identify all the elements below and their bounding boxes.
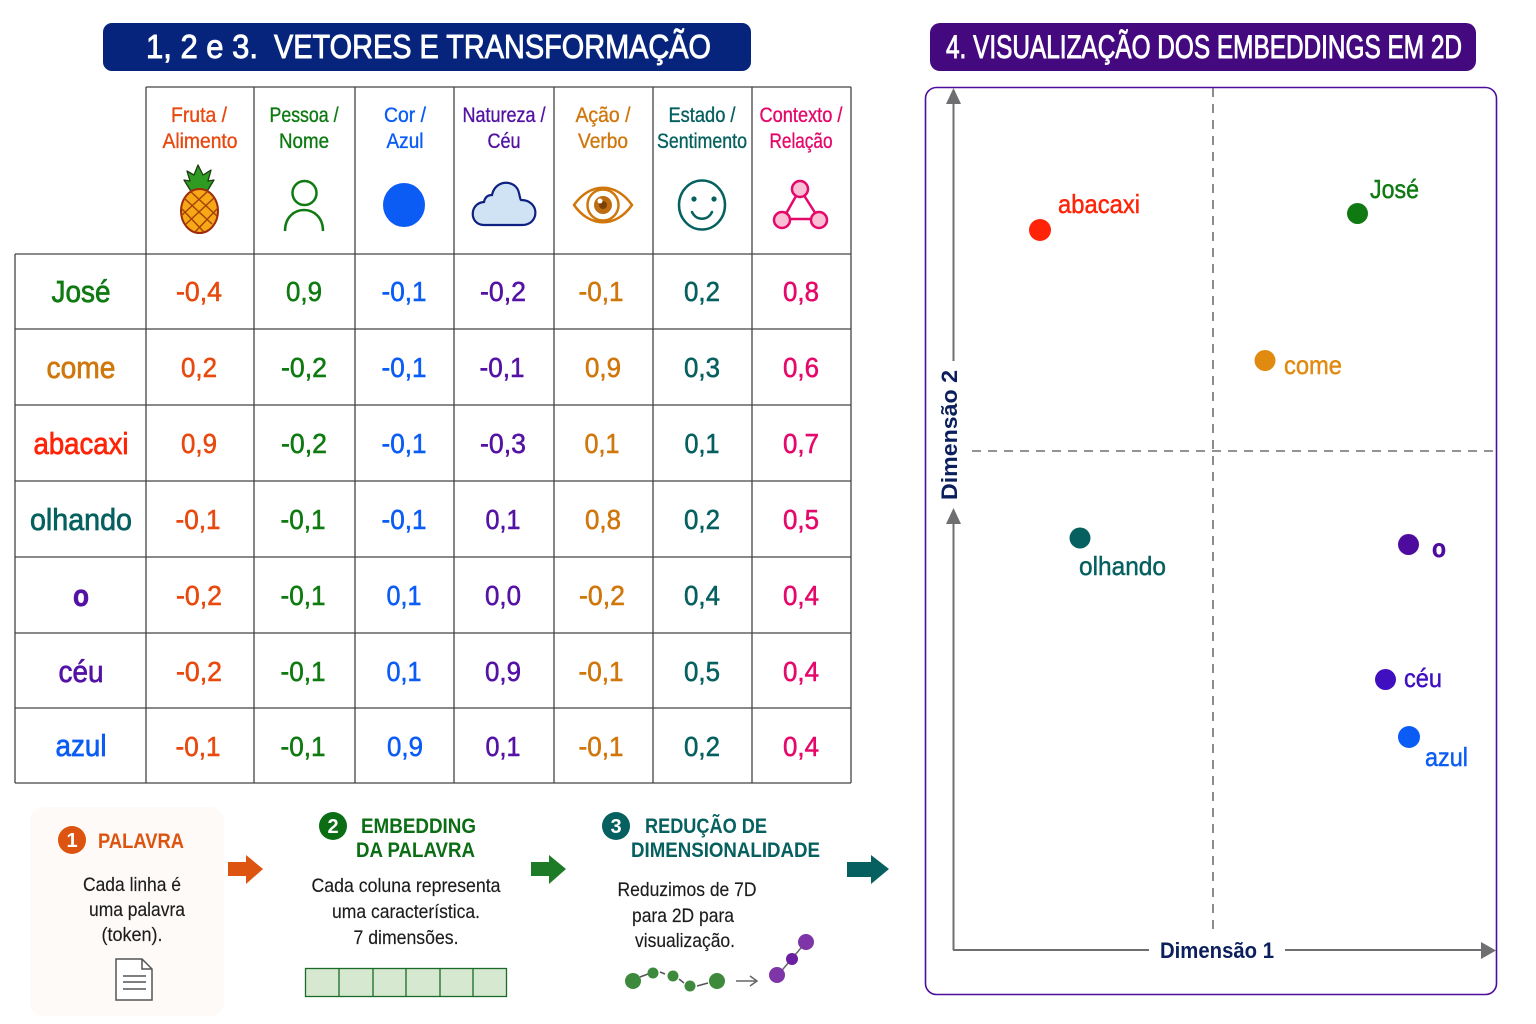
column values: natureza: 0,0 (485, 580, 521, 611)
column headers: Nome (279, 130, 329, 153)
heading redução (631, 815, 820, 862)
step 1 text (83, 874, 185, 946)
step 3 text (618, 879, 756, 952)
column values: contexto: 0,8 (783, 276, 819, 307)
column headers: Relação (770, 130, 832, 153)
badge 2: 2 (327, 816, 339, 838)
icon: pineapple (181, 165, 218, 233)
point: come: come (1284, 350, 1342, 380)
column values: pessoa: -0,2 (281, 352, 327, 383)
column values: ação: -0,1 (578, 731, 624, 762)
step 3 text: visualização. (635, 930, 735, 952)
point: céu: céu (1404, 663, 1442, 693)
icon: relation triangle (774, 181, 827, 228)
column values: estado: 0,5 (684, 656, 720, 687)
column headers: Cor / (384, 104, 426, 127)
column values: fruta: 0,2 (181, 352, 217, 383)
column values: ação (578, 276, 625, 762)
column values: contexto: 0,5 (783, 504, 819, 535)
column values: pessoa: 0,9 (286, 276, 322, 307)
column values: fruta: -0,1 (176, 504, 220, 535)
step 1 text: (token). (102, 924, 162, 946)
column values: fruta: -0,2 (176, 656, 222, 687)
row labels: abacaxi (34, 426, 128, 461)
column values: natureza: 0,9 (485, 656, 521, 687)
icon: document (116, 959, 152, 1000)
panel: step 1 palavra (30, 807, 224, 1016)
column headers: Estado / (668, 104, 736, 127)
point: o: o (1432, 533, 1446, 563)
heading embedding: EMBEDDING (361, 815, 476, 838)
panel: step 3 redução (602, 812, 820, 992)
column values: fruta: -0,1 (176, 731, 220, 762)
reduction diagram (625, 934, 814, 992)
embedding table (15, 87, 851, 783)
point: céu (1375, 663, 1442, 693)
column values: cor: 0,1 (386, 580, 422, 611)
column values: estado: 0,4 (684, 580, 720, 611)
column headers: Céu (488, 130, 520, 153)
embedding vector cells (306, 968, 506, 997)
badge 1 (58, 826, 86, 854)
step 2 text: Cada coluna representa (312, 875, 501, 897)
row labels: o (73, 578, 89, 613)
column headers: Natureza / (462, 104, 546, 127)
title: vetores e transformação: 1, 2 e 3. (146, 28, 258, 65)
column values: cor: -0,1 (382, 352, 426, 383)
column headers: Contexto / (760, 104, 843, 127)
column values: natureza: 0,1 (486, 504, 520, 535)
column values: pessoa: -0,1 (280, 731, 326, 762)
point: o (1398, 533, 1446, 563)
column values: contexto: 0,6 (783, 352, 819, 383)
column values: contexto: 0,4 (783, 731, 819, 762)
column values: fruta (176, 276, 222, 762)
y axis: Dimensão 2 (937, 370, 962, 500)
step 3 text: Reduzimos de 7D (618, 879, 756, 901)
row labels: azul (56, 728, 106, 763)
column values: pessoa: -0,1 (280, 656, 326, 687)
column headers: Azul (386, 130, 424, 153)
column values: ação: 0,1 (584, 428, 620, 459)
column values: estado: 0,1 (684, 428, 720, 459)
badge 1: 1 (66, 830, 78, 852)
column values: contexto: 0,7 (783, 428, 819, 459)
step 2 text: uma característica. (332, 901, 480, 923)
heading redução: REDUÇÃO DE (645, 815, 767, 838)
heading embedding: DA PALAVRA (356, 839, 475, 862)
column headers: Alimento (162, 130, 238, 153)
point: José (1347, 174, 1419, 224)
column headers: Sentimento (657, 130, 747, 153)
column values: cor: -0,1 (382, 504, 426, 535)
icon: blue circle (383, 183, 425, 227)
point: azul: azul (1425, 742, 1468, 772)
heading embedding (356, 815, 476, 862)
icon: smiley (679, 180, 725, 230)
row labels: olhando (30, 502, 132, 537)
column values: cor: -0,1 (382, 428, 426, 459)
column values: cor: -0,1 (382, 276, 426, 307)
heading palavra: PALAVRA (98, 830, 184, 853)
column values: natureza: -0,3 (480, 428, 526, 459)
arrow: orange (228, 855, 263, 884)
column values: estado: 0,2 (684, 504, 720, 535)
column values: ação: 0,9 (585, 352, 621, 383)
x axis: Dimensão 1 (1160, 938, 1274, 963)
point: olhando (1070, 528, 1166, 581)
arrow: teal (847, 855, 889, 884)
column values: estado: 0,2 (684, 276, 720, 307)
title: vetores e transformação (103, 23, 751, 71)
column values: pessoa: -0,2 (281, 428, 327, 459)
point: abacaxi (1029, 189, 1140, 241)
step 2 text: 7 dimensões. (354, 927, 458, 949)
column values: contexto: 0,4 (783, 656, 819, 687)
panel: 2d scatter plot (926, 88, 1496, 994)
point: abacaxi: abacaxi (1058, 189, 1140, 219)
panel: step 2 embedding (306, 812, 506, 997)
column values: contexto: 0,4 (783, 580, 819, 611)
column headers: Fruta / (171, 104, 227, 127)
row labels: come (46, 350, 116, 385)
point: azul (1398, 726, 1468, 772)
column values: pessoa: -0,1 (280, 580, 326, 611)
column values: natureza: -0,2 (480, 276, 526, 307)
column values: estado: 0,3 (684, 352, 720, 383)
step 3 text: para 2D para (632, 905, 734, 927)
column headers: Pessoa / (270, 104, 339, 127)
point: olhando: olhando (1079, 551, 1166, 581)
column values: ação: 0,8 (585, 504, 621, 535)
column values: natureza: 0,1 (486, 731, 520, 762)
column values: pessoa (280, 276, 327, 762)
x axis (953, 938, 1496, 963)
column values: cor (382, 276, 426, 762)
title: visualização dos embeddings (930, 23, 1476, 71)
column values: natureza (480, 276, 526, 762)
column values: pessoa: -0,1 (280, 504, 326, 535)
badge 3 (602, 812, 630, 840)
icon: cloud (473, 183, 535, 225)
title: vetores e transformação: VETORES E TRANSFORMAÇÃO (274, 28, 711, 65)
y axis (937, 88, 962, 950)
heading redução: DIMENSIONALIDADE (631, 839, 820, 862)
column headers: Verbo (578, 130, 628, 153)
point: come (1254, 350, 1342, 380)
column values: natureza: -0,1 (480, 352, 524, 383)
column values: contexto (783, 276, 819, 762)
column values: estado (684, 276, 720, 762)
badge 3: 3 (610, 816, 622, 838)
row labels: José (52, 274, 110, 309)
table grid (15, 87, 851, 783)
step 1 text: uma palavra (89, 899, 185, 921)
column values: fruta: -0,4 (176, 276, 222, 307)
column values: cor: 0,9 (387, 731, 423, 762)
column values: ação: -0,1 (578, 656, 624, 687)
column values: estado: 0,2 (684, 731, 720, 762)
guide lines (972, 88, 1496, 930)
step 2 text (312, 875, 501, 949)
row labels: céu (58, 654, 104, 689)
icon: eye (574, 188, 632, 222)
row labels (30, 274, 132, 763)
column values: ação: -0,1 (578, 276, 624, 307)
column headers: Ação / (576, 104, 631, 127)
column headers (162, 104, 843, 153)
column values: cor: 0,1 (386, 656, 422, 687)
column values: fruta: -0,2 (176, 580, 222, 611)
column values: fruta: 0,9 (181, 428, 217, 459)
step 1 text: Cada linha é (83, 874, 181, 896)
icon: person (285, 181, 323, 231)
column values: ação: -0,2 (579, 580, 625, 611)
badge 2 (319, 812, 347, 840)
point: José: José (1370, 174, 1419, 204)
arrow: green (531, 855, 566, 884)
